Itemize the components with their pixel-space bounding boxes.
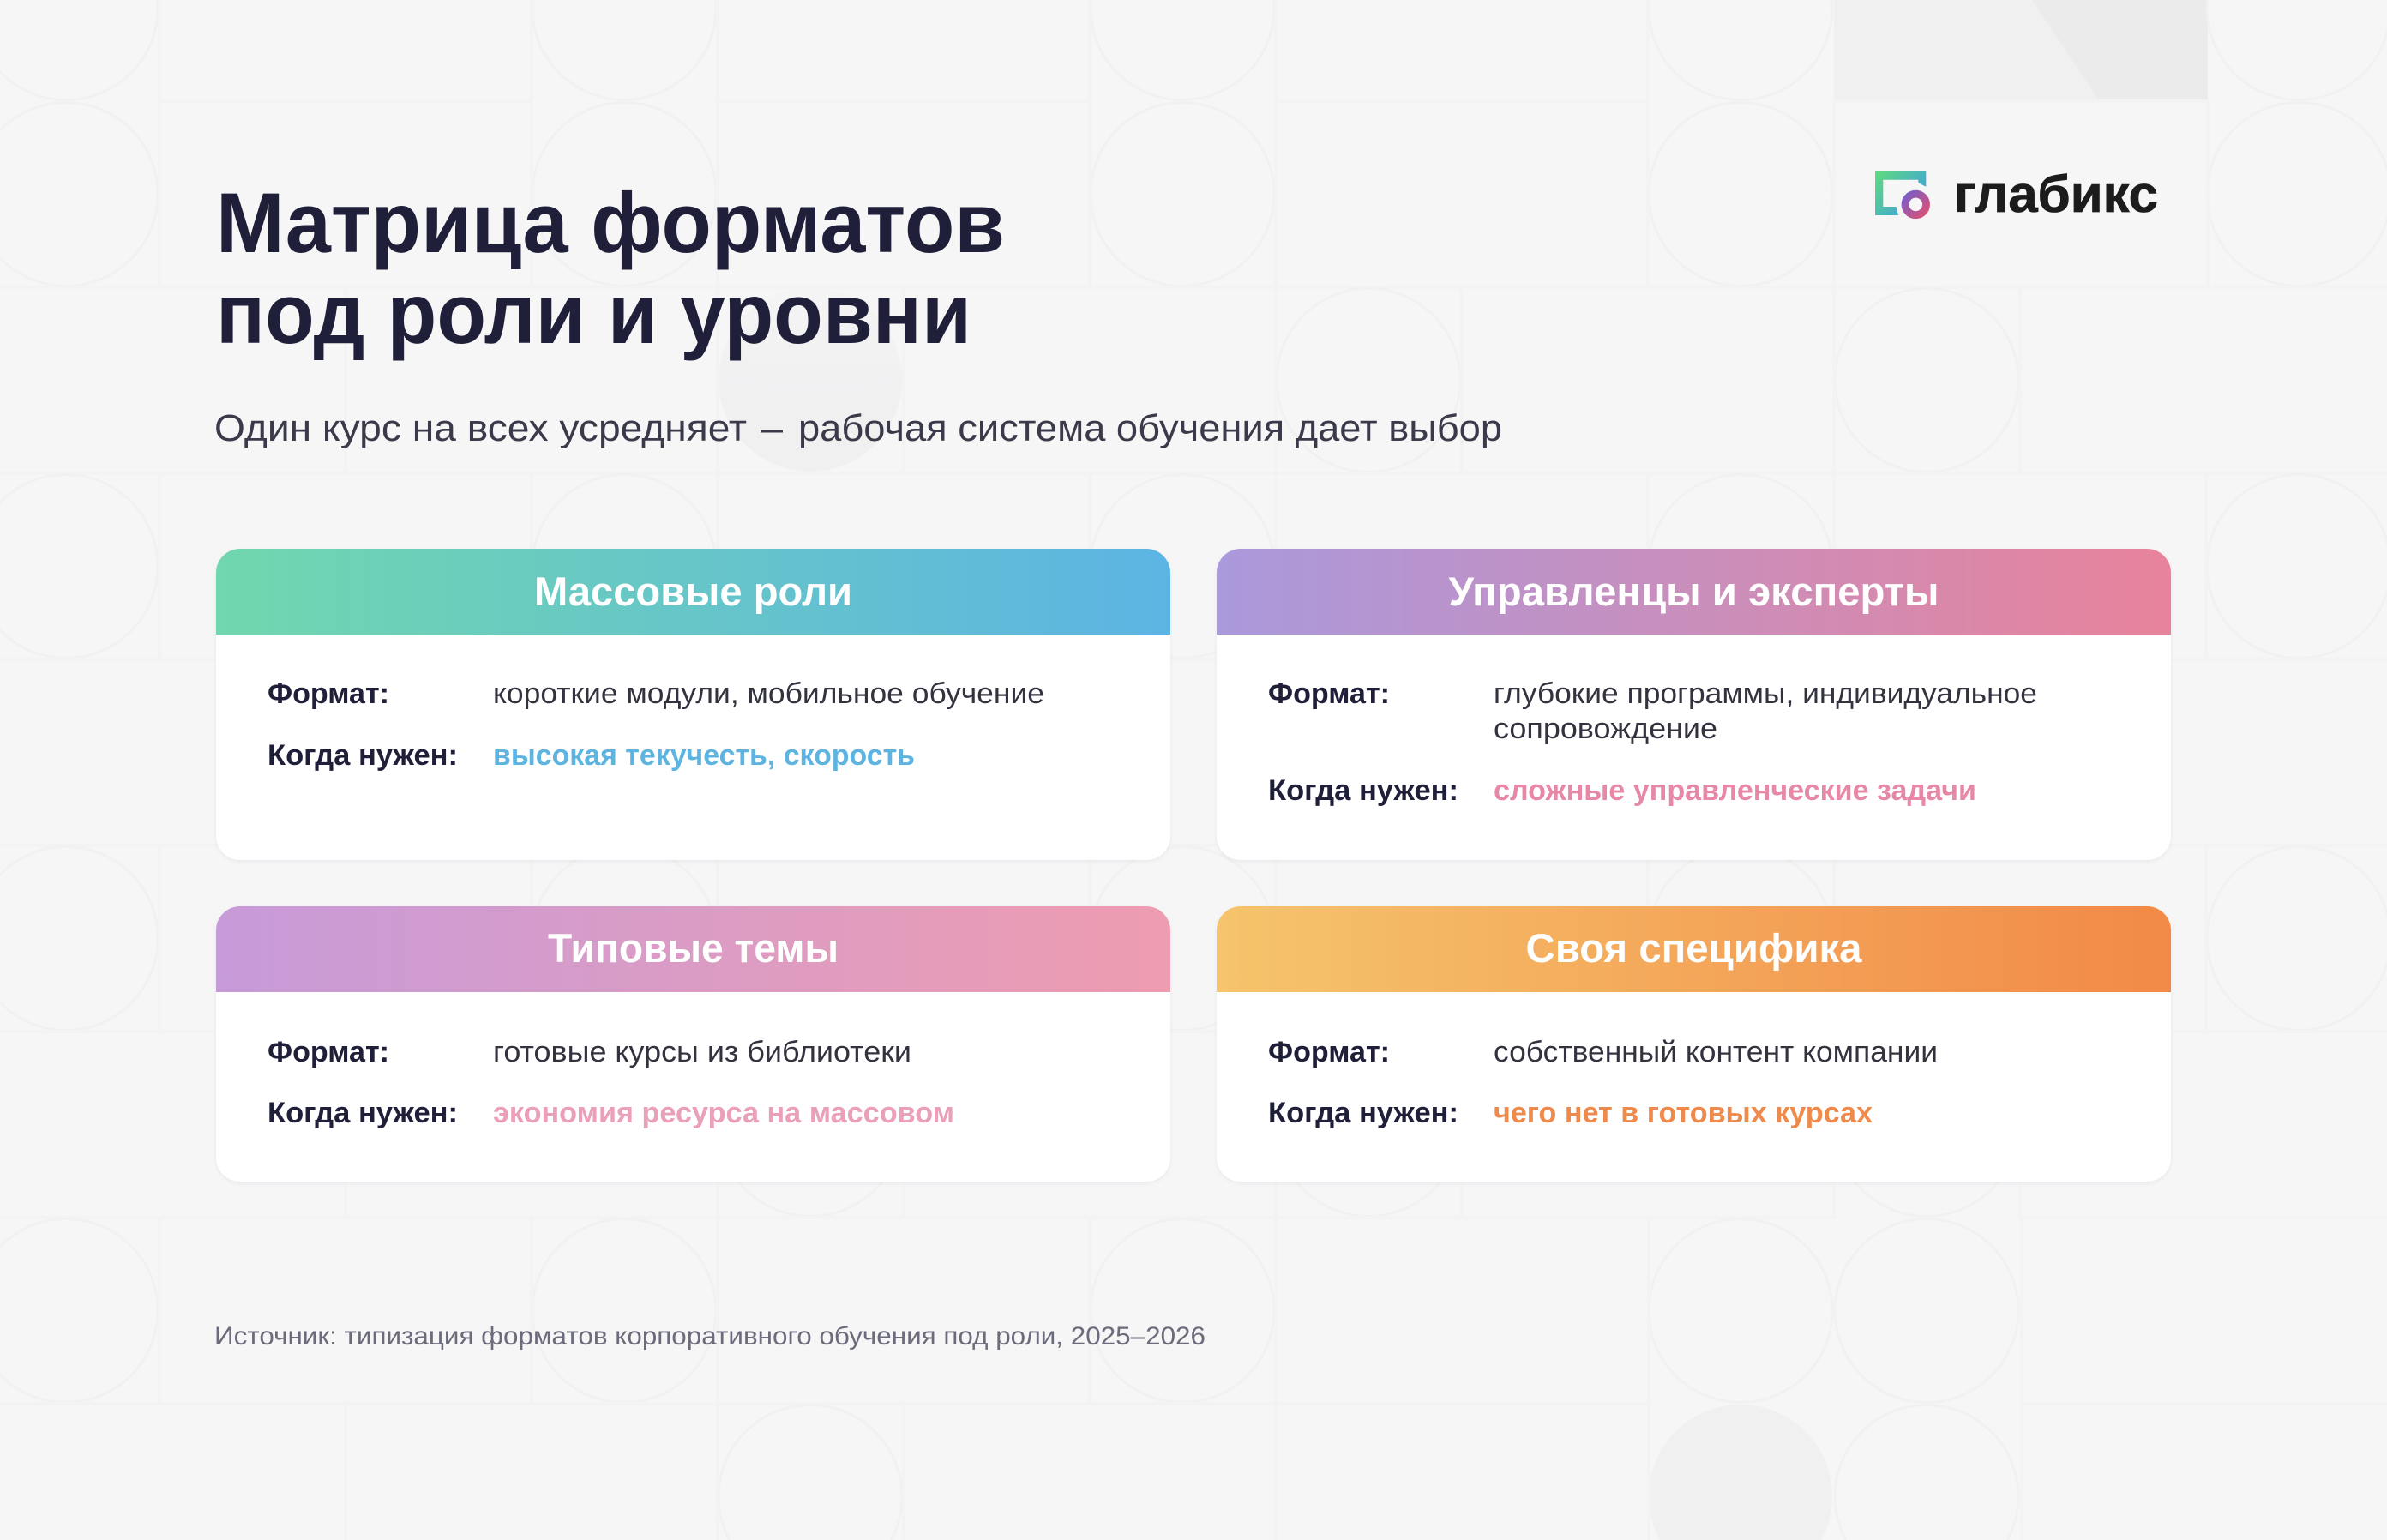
when needed row: Когда нужен: [1268, 1097, 1458, 1129]
format row [268, 1036, 911, 1068]
when needed row [268, 1097, 954, 1129]
when needed row [1268, 1097, 1873, 1129]
format row: Формат: [268, 1036, 389, 1068]
panel: Типовые темы [216, 906, 1170, 1182]
card heading: Массовые роли [534, 568, 852, 614]
subtitle [214, 407, 1502, 449]
format row: сопровождение [1494, 713, 1717, 745]
subtitle: рабочая система обучения дает выбор [798, 407, 1502, 449]
when needed row [1268, 774, 1976, 807]
subtitle: Один курс на всех усредняет [214, 407, 747, 449]
format row [268, 677, 1044, 710]
when needed row: высокая текучесть, скорость [493, 739, 915, 772]
when needed row: Когда нужен: [1268, 774, 1458, 807]
card heading: Управленцы и эксперты [1449, 568, 1939, 614]
panel: Своя специфика [1217, 906, 2171, 1182]
when needed row: чего нет в готовых курсах [1494, 1097, 1873, 1129]
card heading: Своя специфика [1526, 925, 1862, 971]
format row: Формат: [268, 677, 389, 710]
format row [1268, 677, 2037, 745]
card header [216, 906, 1170, 992]
source note: Источник: типизация форматов корпоративного обучения под роли, 2025–2026 [214, 1322, 1206, 1351]
when needed row: сложные управленческие задачи [1494, 774, 1976, 807]
format row: короткие модули, мобильное обучение [493, 677, 1044, 710]
card heading: Типовые темы [548, 925, 839, 971]
title: Матрица форматов [216, 175, 1005, 270]
format row: Формат: [1268, 1036, 1390, 1068]
title [216, 175, 1005, 361]
logo [1875, 165, 2158, 223]
when needed row: экономия ресурса на массовом [493, 1097, 954, 1129]
card header [1217, 549, 2171, 635]
format row: глубокие программы, индивидуальное [1494, 677, 2037, 710]
format row: готовые курсы из библиотеки [493, 1036, 911, 1068]
format row: Формат: [1268, 677, 1390, 710]
logo wordmark: глабикс [1954, 165, 2158, 223]
card header [1217, 906, 2171, 992]
subtitle: — [761, 407, 783, 449]
when needed row: Когда нужен: [268, 739, 458, 772]
format row: собственный контент компании [1494, 1036, 1938, 1068]
panel: Управленцы и эксперты [1217, 549, 2171, 860]
title: под роли и уровни [216, 266, 971, 361]
card header [216, 549, 1170, 635]
format row [1268, 1036, 1938, 1068]
when needed row: Когда нужен: [268, 1097, 458, 1129]
panel: Массовые роли [216, 549, 1170, 860]
icon: logo mark [1875, 171, 1927, 215]
when needed row [268, 739, 915, 772]
